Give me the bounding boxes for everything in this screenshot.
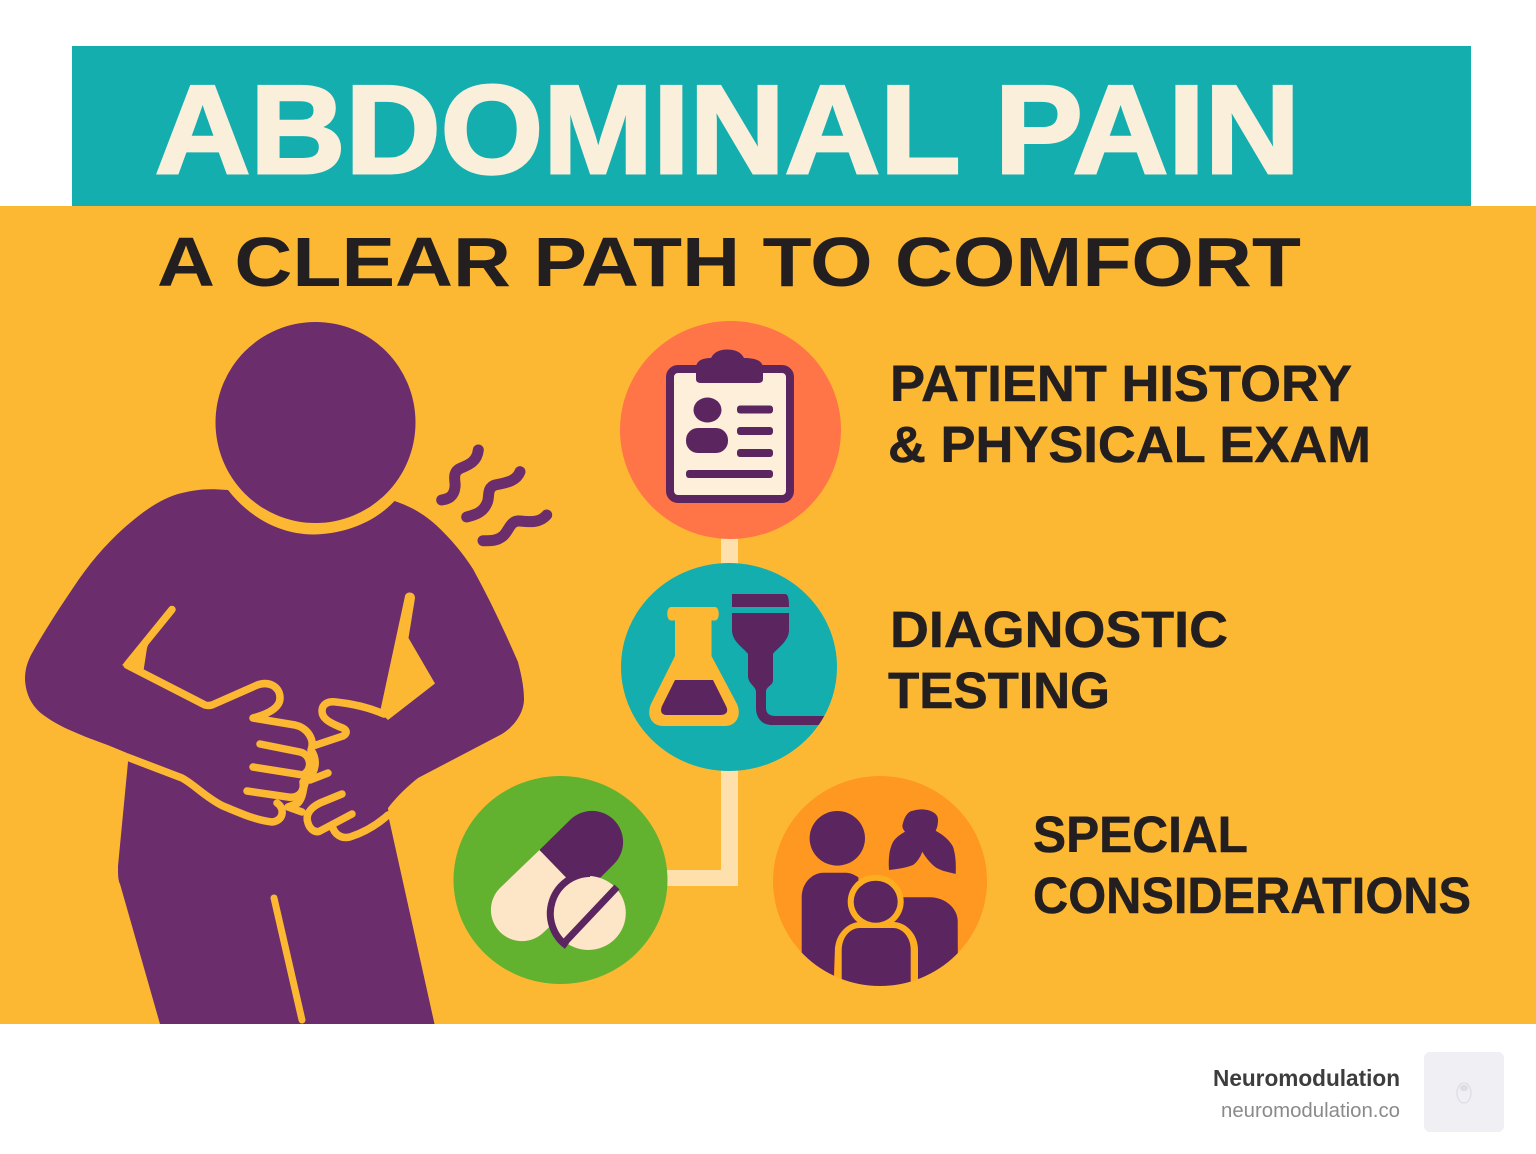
icon: faint logo: [1457, 1083, 1471, 1103]
step 1 label: & PHYSICAL EXAM: [888, 416, 1371, 473]
figure head: [216, 322, 416, 523]
step 3 circle: medication: [454, 776, 668, 984]
step 2 label: TESTING: [888, 662, 1110, 719]
step 4 label: CONSIDERATIONS: [1033, 867, 1471, 924]
connector lines between steps: [664, 536, 738, 886]
panel: main yellow background: [0, 206, 1536, 1024]
leg divider: [274, 898, 302, 1020]
step 4 label: SPECIAL: [1033, 806, 1248, 863]
icon: capsule and tablet: [491, 811, 626, 950]
arm outlines and hands: [127, 610, 388, 1020]
step 2 circle: diagnostic testing: [621, 563, 837, 771]
icon: ultrasound probe: [732, 594, 830, 725]
right thumb outline: [313, 702, 384, 746]
left fingers: [253, 744, 310, 775]
step 2 label: [888, 601, 1228, 719]
figure body silhouette: [25, 489, 524, 1024]
icon: family: [802, 809, 958, 1000]
panel: title banner: [72, 46, 1471, 206]
title: ABDOMINAL PAIN: [155, 59, 1300, 200]
right fingers: [310, 773, 328, 780]
right arm triangle gap: [380, 592, 435, 720]
icon: clipboard: [670, 350, 790, 499]
step 4 label: [1033, 806, 1471, 924]
brand name: Neuromodulation: [1213, 1065, 1400, 1091]
step 1 label: PATIENT HISTORY: [890, 355, 1352, 412]
pain wavy lines: [442, 450, 547, 541]
brand url: neuromodulation.co: [1221, 1100, 1400, 1122]
step 2 label: DIAGNOSTIC: [890, 601, 1228, 658]
step 4 circle: special considerations: [773, 776, 987, 1000]
illustration: person holding abdomen: [25, 322, 547, 1024]
left arm wedge gap: [122, 640, 150, 674]
logo placeholder box: [1424, 1052, 1504, 1132]
left arm outline and thumb: [127, 610, 315, 812]
icon: flask: [649, 607, 739, 726]
step 1 circle: patient history: [620, 321, 841, 539]
subtitle: A CLEAR PATH TO COMFORT: [157, 223, 1301, 301]
step 1 label: [888, 355, 1371, 473]
